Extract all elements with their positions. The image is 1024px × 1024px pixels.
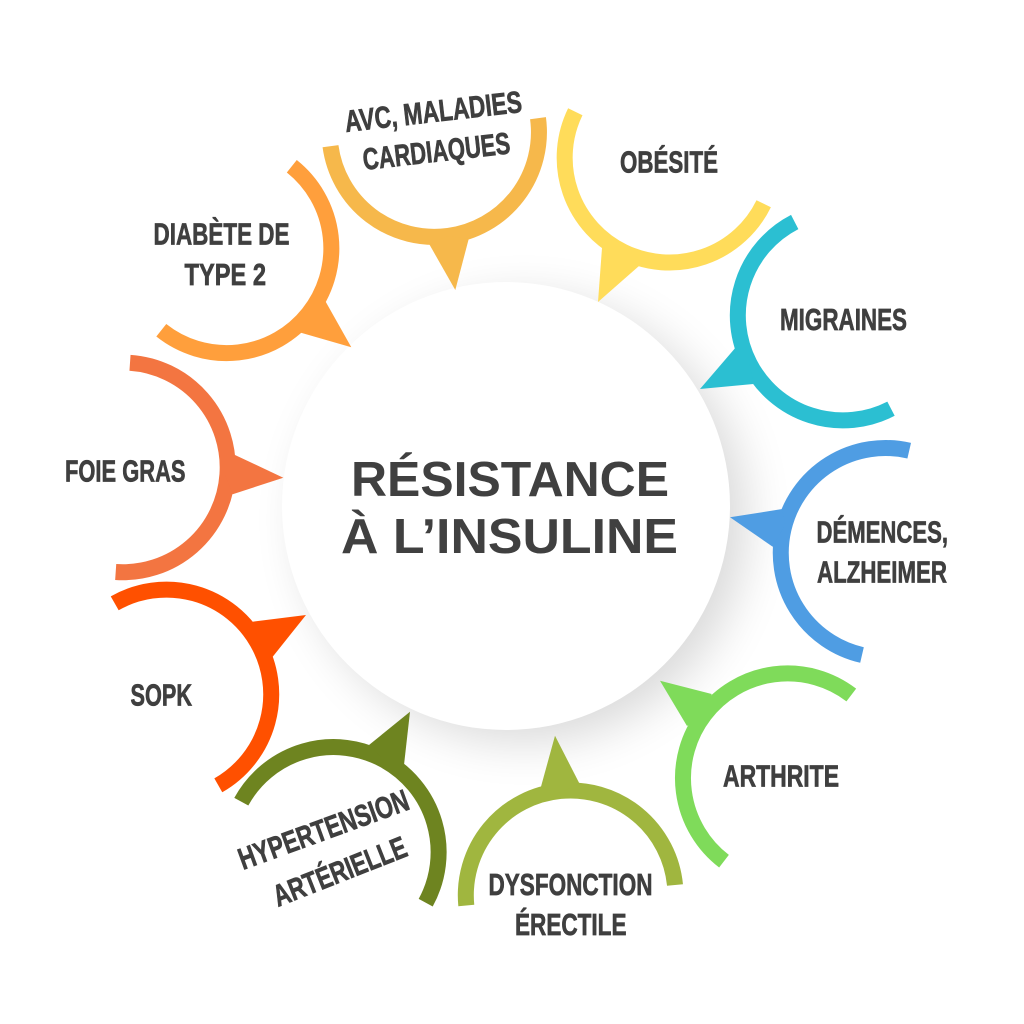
central circle: résistance à l'insuline	[282, 282, 746, 742]
label: AVC, MALADIES	[343, 85, 524, 139]
label: TYPE 2	[184, 258, 266, 292]
label: ARTÉRIELLE	[268, 829, 412, 914]
item: démences, Alzheimer	[730, 448, 948, 655]
label: ARTHRITE	[723, 760, 839, 794]
item: arthrite	[660, 673, 851, 861]
central title: RÉSISTANCE	[351, 453, 669, 507]
label: ALZHEIMER	[817, 556, 947, 590]
label	[488, 868, 652, 942]
label: MIGRAINES	[780, 303, 907, 337]
label: HYPERTENSION	[234, 783, 414, 877]
central title: À L’INSULINE	[341, 510, 678, 564]
item: AVC, maladies cardiaques	[330, 85, 539, 290]
label	[343, 85, 524, 177]
label: OBÉSITÉ	[620, 144, 718, 180]
label: FOIE GRAS	[65, 454, 186, 488]
label: CARDIAQUES	[361, 126, 512, 177]
item: diabète de type 2	[154, 166, 351, 353]
item: dysfonction érectile	[466, 736, 675, 942]
label	[234, 783, 414, 914]
central title	[341, 453, 678, 564]
label: DYSFONCTION	[488, 868, 652, 902]
label: SOPK	[130, 678, 192, 712]
item: obésité	[565, 112, 764, 302]
item: migraines	[700, 222, 907, 420]
label: DÉMENCES,	[816, 514, 948, 550]
item: foie gras	[65, 363, 283, 572]
label: DIABÈTE DE	[154, 216, 290, 252]
item: SOPK	[115, 590, 306, 785]
label	[816, 514, 948, 590]
label	[154, 216, 290, 292]
item: hypertension artérielle	[234, 712, 439, 914]
label: ÉRECTILE	[515, 907, 626, 942]
